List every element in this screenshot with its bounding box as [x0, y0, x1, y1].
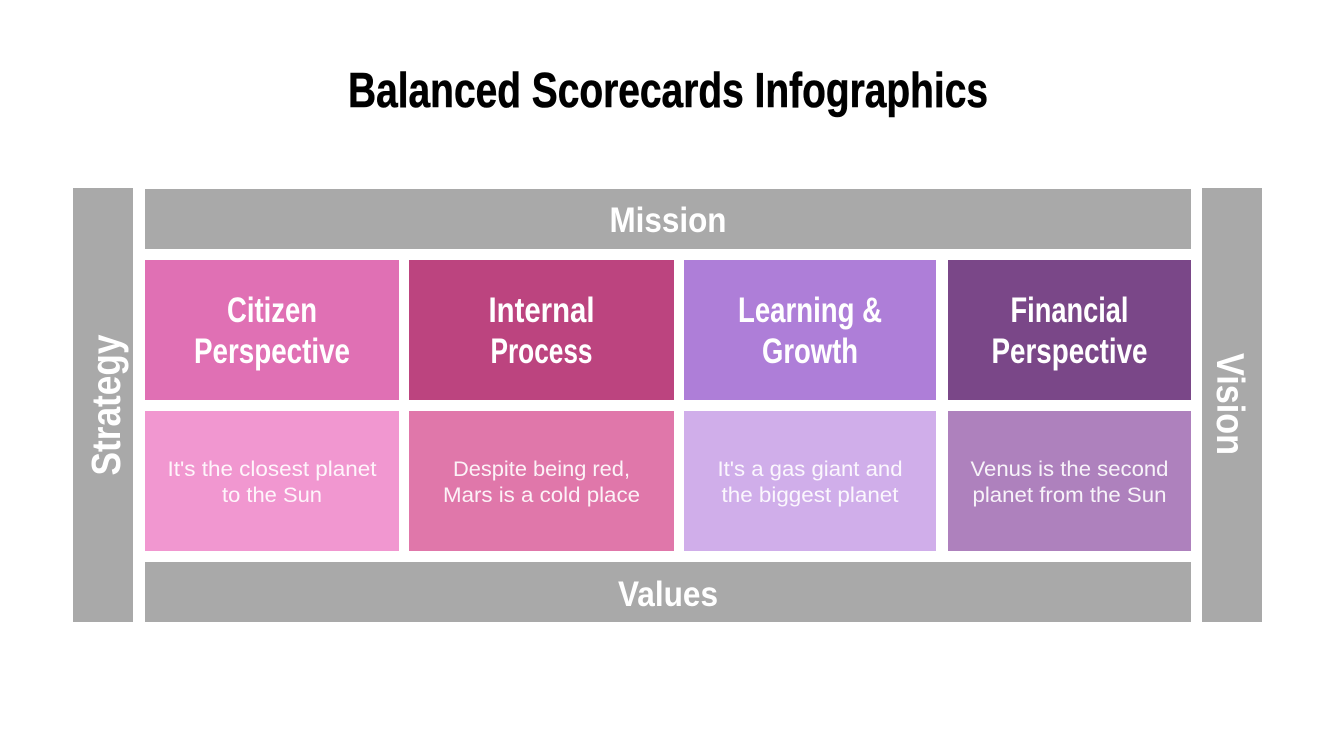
panel: learning description: It's a gas giant and [718, 457, 902, 481]
panel: financial description [948, 411, 1191, 551]
panel: mission: Mission [610, 201, 726, 240]
panel: vision [1202, 188, 1262, 622]
panel: vision: Vision [1208, 353, 1251, 455]
panel: citizen perspective heading [145, 260, 399, 400]
panel: citizen perspective heading: Citizen [227, 291, 317, 330]
panel: financial perspective heading: Perspective [992, 332, 1148, 371]
panel: internal process description: Mars is a cold place [443, 483, 640, 507]
panel: learning and growth heading: Growth [762, 332, 858, 371]
panel: learning and growth heading [684, 260, 936, 400]
panel: financial description: Venus is the second [970, 457, 1168, 481]
panel: internal process heading: Internal [488, 291, 594, 330]
panel: citizen description [145, 411, 399, 551]
panel: internal process description [409, 411, 674, 551]
panel: internal process heading [409, 260, 674, 400]
panel: learning and growth heading: Learning & [738, 291, 882, 330]
panel: financial perspective heading [948, 260, 1191, 400]
panel: strategy: Strategy [83, 334, 129, 476]
panel: financial description: planet from the Sun [972, 483, 1166, 507]
panel: citizen perspective heading: Perspective [194, 332, 350, 371]
title: Balanced Scorecards Infographics [348, 64, 988, 118]
panel: citizen description: to the Sun [222, 483, 322, 507]
panel: internal process description: Despite being red, [453, 457, 630, 481]
panel: learning description: the biggest planet [722, 483, 899, 507]
panel: values [145, 562, 1191, 622]
panel: values: Values [618, 575, 718, 614]
panel: strategy [73, 188, 133, 622]
panel: internal process heading: Process [490, 332, 592, 371]
panel: citizen description: It's the closest planet [168, 457, 377, 481]
panel: learning description [684, 411, 936, 551]
panel: mission [145, 189, 1191, 249]
panel: financial perspective heading: Financial [1010, 291, 1128, 330]
